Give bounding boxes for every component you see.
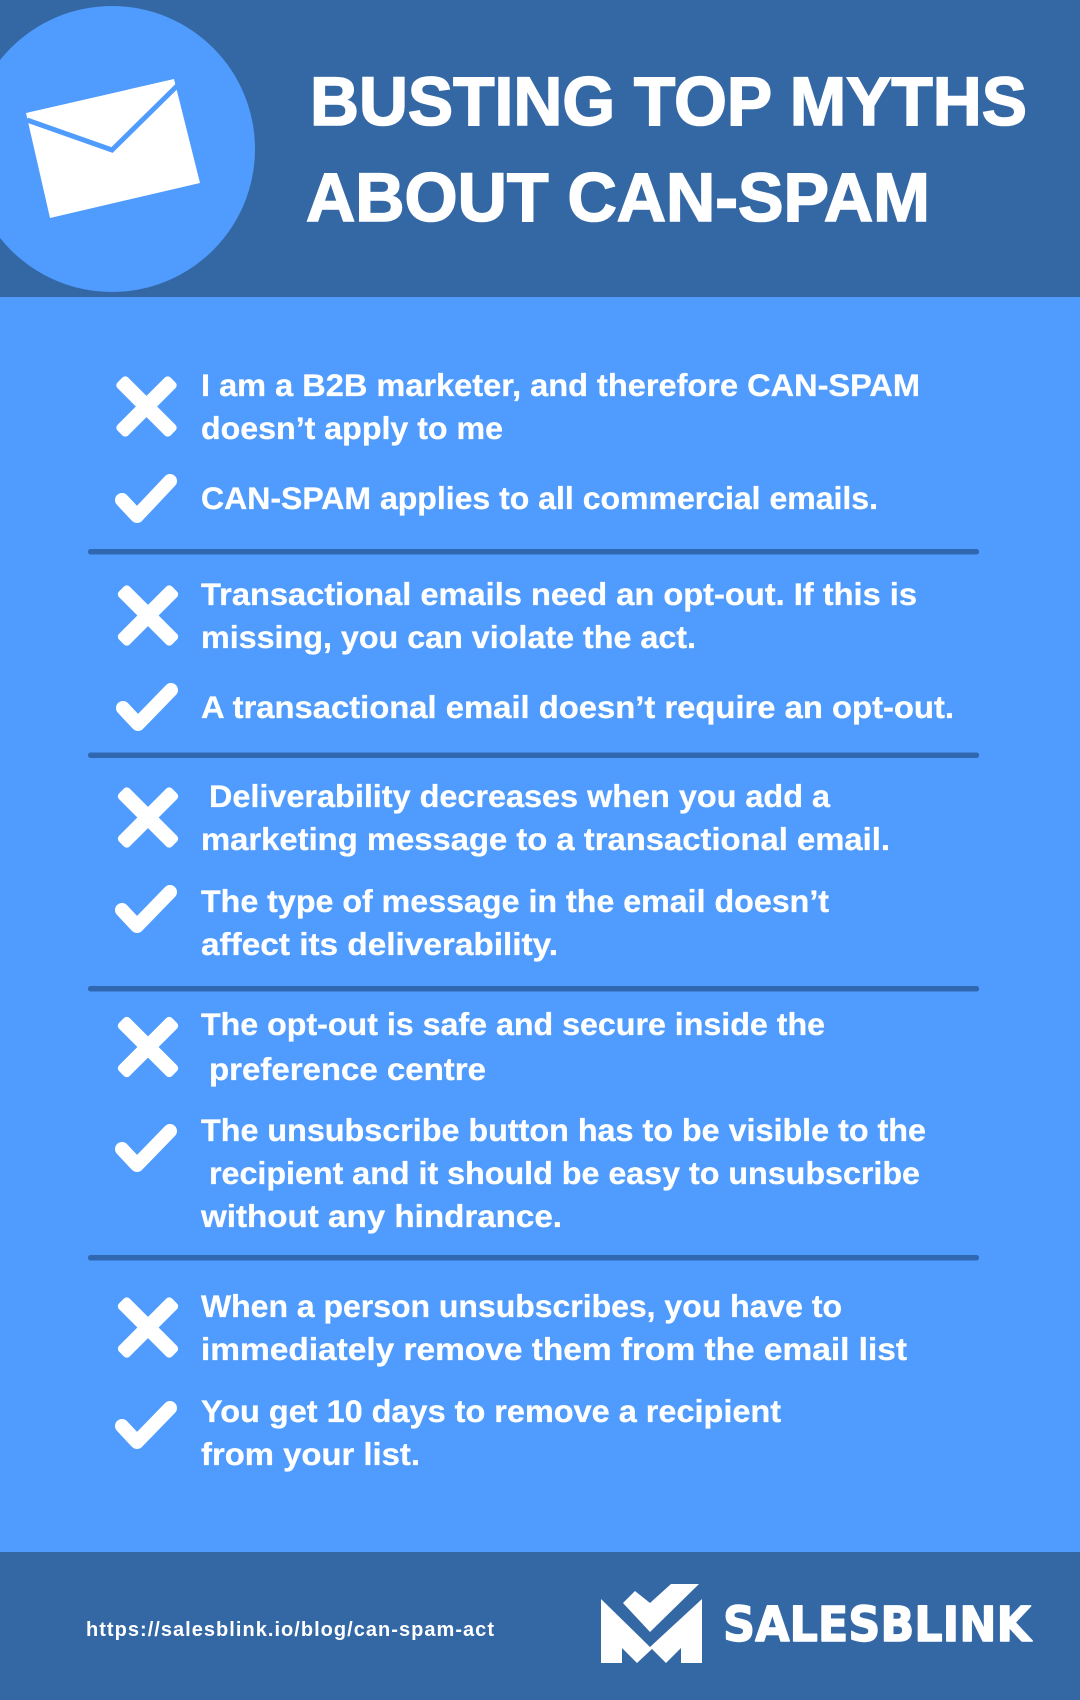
icon: check xyxy=(122,481,170,516)
footer band xyxy=(0,1552,1080,1700)
icon: salesblink logo xyxy=(601,1584,702,1663)
fact text: recipient and it should be easy to unsubscribe xyxy=(209,1155,920,1191)
myth 3 xyxy=(95,764,890,962)
myth text xyxy=(201,1006,825,1087)
myth 2 xyxy=(95,562,954,725)
myth text: When a person unsubscribes, you have to xyxy=(201,1288,842,1324)
icon: check xyxy=(122,1408,170,1442)
myth text: missing, you can violate the act. xyxy=(201,619,696,655)
fact text: without any hindrance. xyxy=(200,1198,562,1234)
fact text: from your list. xyxy=(201,1436,420,1472)
header band xyxy=(0,0,1080,297)
icon: cross xyxy=(95,994,201,1100)
fact text: A transactional email doesn’t require an opt-out. xyxy=(201,689,954,725)
myth text: immediately remove them from the email list xyxy=(201,1331,908,1367)
title: ABOUT CAN-SPAM xyxy=(306,159,930,236)
myth text xyxy=(201,367,920,446)
icon: check xyxy=(123,690,171,724)
title: BUSTING TOP MYTHS xyxy=(310,63,1027,140)
myth text: doesn’t apply to me xyxy=(201,410,503,446)
myth text xyxy=(201,576,917,655)
fact text: You get 10 days to remove a recipient xyxy=(201,1393,782,1429)
myth text: Deliverability decreases when you add a xyxy=(209,778,830,814)
title xyxy=(306,63,1027,236)
myth text: Transactional emails need an opt-out. If this is xyxy=(201,576,917,612)
fact text xyxy=(201,883,830,962)
myth 4 xyxy=(95,994,926,1234)
icon: check xyxy=(122,1131,170,1165)
myth text: I am a B2B marketer, and therefore CAN-SPAM xyxy=(201,367,920,403)
myth text xyxy=(201,1288,908,1367)
myth text: marketing message to a transactional email. xyxy=(201,821,890,857)
icon: cross xyxy=(95,764,201,871)
myth 1 xyxy=(93,353,920,516)
myth text xyxy=(201,778,890,857)
icon: cross xyxy=(95,562,201,669)
icon: check xyxy=(122,892,170,926)
fact text: The unsubscribe button has to be visible to the xyxy=(201,1112,926,1148)
myth 5 xyxy=(95,1274,908,1472)
fact text: The type of message in the email doesn’t xyxy=(201,883,830,919)
myth text: The opt-out is safe and secure inside the xyxy=(201,1006,825,1042)
icon: cross xyxy=(95,1274,201,1381)
brand name: SALESBLINK xyxy=(723,1597,1033,1653)
icon: cross xyxy=(93,353,200,460)
fact text: affect its deliverability. xyxy=(201,926,558,962)
fact text: CAN-SPAM applies to all commercial emails. xyxy=(201,480,878,516)
source link: https://salesblink.io/blog/can-spam-act xyxy=(86,1619,494,1641)
fact text xyxy=(200,1112,926,1234)
myth text: preference centre xyxy=(209,1051,486,1087)
icon: envelope in circle xyxy=(0,6,255,292)
fact text xyxy=(201,1393,782,1472)
